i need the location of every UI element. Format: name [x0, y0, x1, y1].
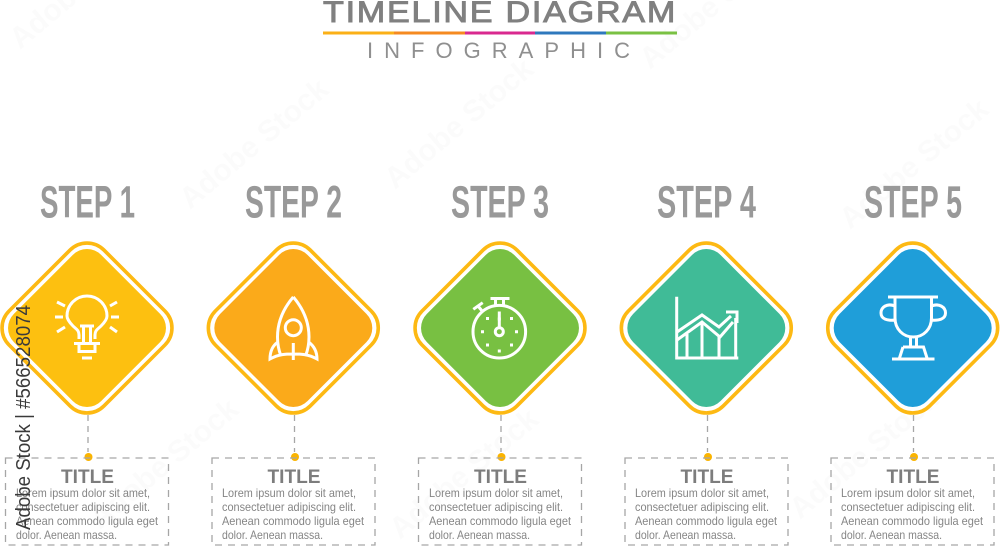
icon: stopwatch	[473, 298, 526, 358]
step 2 body: dolor. Aenean massa.	[222, 528, 323, 542]
step 3	[405, 176, 595, 545]
step 1 diamond	[0, 233, 182, 423]
step 1	[0, 176, 182, 545]
connector	[87, 415, 89, 452]
step 1 body: Lorem ipsum dolor sit amet,	[16, 486, 150, 500]
step 5	[818, 176, 1000, 545]
dot	[704, 453, 712, 461]
colour rule	[323, 32, 677, 34]
dot	[498, 453, 506, 461]
header	[323, 0, 677, 63]
step 2 body	[222, 486, 365, 542]
stock id side label: Adobe Stock | #566528074	[13, 305, 35, 530]
connector	[500, 415, 502, 452]
step 5 body: consectetuer adipiscing elit.	[841, 500, 975, 514]
step 5 body: Lorem ipsum dolor sit amet,	[841, 486, 975, 500]
step 5 body: Aenean commodo ligula eget	[841, 514, 984, 528]
step 1 heading: STEP 1	[40, 176, 135, 228]
step 5 body	[841, 486, 984, 542]
step 2	[198, 176, 388, 545]
step 5 title: TITLE	[886, 466, 940, 488]
dot	[84, 453, 92, 461]
step 2 text panel	[212, 458, 375, 545]
step 1 body: consectetuer adipiscing elit.	[16, 500, 150, 514]
dot	[291, 453, 299, 461]
connector	[912, 415, 914, 452]
step 4 diamond	[611, 233, 801, 423]
connector	[294, 415, 296, 452]
step 4 body: Aenean commodo ligula eget	[635, 514, 778, 528]
step 1 title: TITLE	[61, 466, 114, 488]
step 4 text panel	[625, 458, 788, 545]
step 2 title: TITLE	[268, 466, 320, 488]
step 3 body	[429, 486, 572, 542]
step 2 diamond	[198, 233, 388, 423]
icon: rocket	[270, 297, 317, 360]
step 3 text panel	[418, 458, 582, 545]
step 1 body	[16, 486, 159, 542]
step 4 body: consectetuer adipiscing elit.	[635, 500, 769, 514]
step 3 body: Lorem ipsum dolor sit amet,	[429, 486, 563, 500]
step 3 heading: STEP 3	[451, 176, 549, 228]
step 5 diamond	[818, 233, 1000, 423]
step 2 heading: STEP 2	[245, 176, 342, 228]
step 3 body: dolor. Aenean massa.	[429, 528, 530, 542]
step 4 body: dolor. Aenean massa.	[635, 528, 736, 542]
step 2 body: Lorem ipsum dolor sit amet,	[222, 486, 356, 500]
icon: trophy	[881, 297, 946, 359]
step 1 body: dolor. Aenean massa.	[16, 528, 117, 542]
step 5 text panel	[831, 458, 994, 545]
step 3 title: TITLE	[474, 466, 527, 488]
subtitle: INFOGRAPHIC	[367, 38, 630, 63]
step 4	[611, 176, 801, 545]
icon: light bulb	[55, 296, 119, 358]
step 2 body: Aenean commodo ligula eget	[222, 514, 365, 528]
dot	[910, 453, 918, 461]
icon: growth chart	[677, 297, 738, 358]
step 3 body: consectetuer adipiscing elit.	[429, 500, 563, 514]
step 4 body	[635, 486, 778, 542]
step 4 heading: STEP 4	[657, 176, 756, 228]
connector	[706, 415, 708, 452]
step 1 body: Aenean commodo ligula eget	[16, 514, 159, 528]
step 1 text panel	[6, 458, 168, 545]
step 5 body: dolor. Aenean massa.	[841, 528, 942, 542]
step 3 diamond	[405, 233, 595, 423]
step 2 body: consectetuer adipiscing elit.	[222, 500, 356, 514]
step 3 body: Aenean commodo ligula eget	[429, 514, 572, 528]
step 4 title: TITLE	[680, 466, 734, 488]
step 4 body: Lorem ipsum dolor sit amet,	[635, 486, 769, 500]
